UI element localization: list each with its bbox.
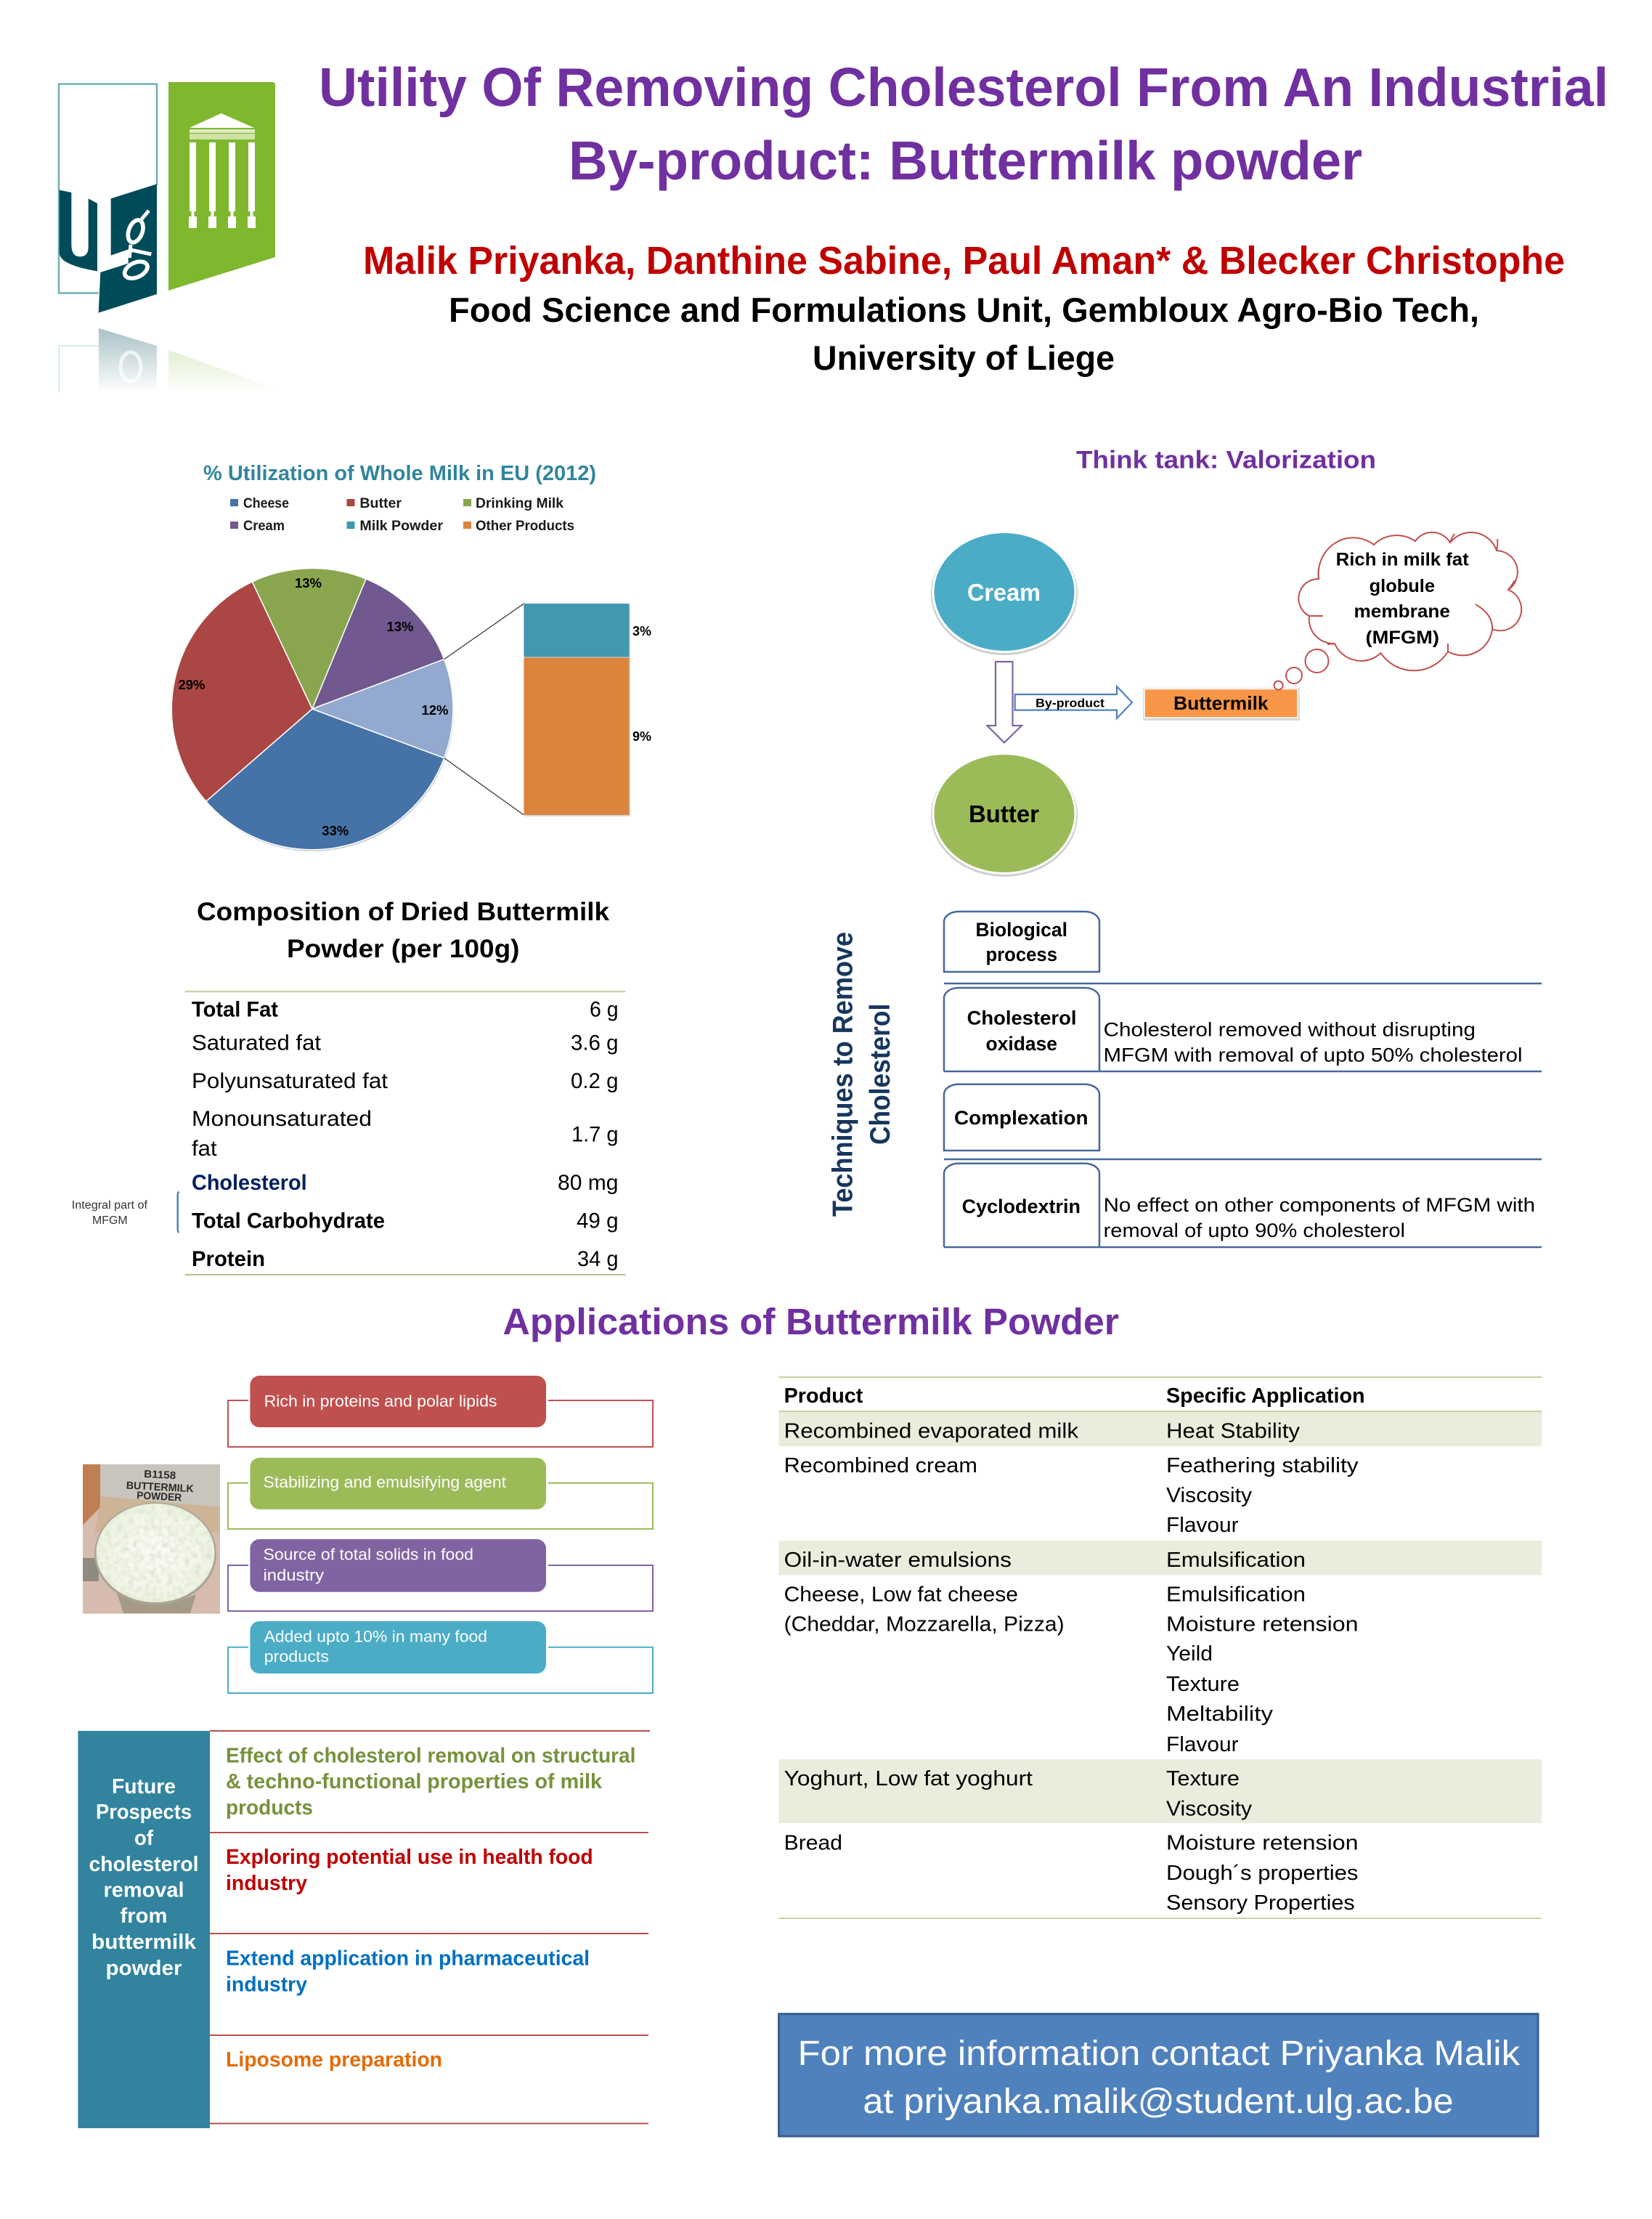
composition row labels: Saturated fat xyxy=(192,1031,321,1055)
composition row values: 3.6 g xyxy=(571,1031,619,1055)
prospect: health food: industry xyxy=(226,1872,307,1895)
prospect: pharmaceutical xyxy=(226,1947,590,1997)
MFGM bracket xyxy=(178,1192,179,1233)
butter circle xyxy=(931,753,1078,877)
specific application column: Moisture retension xyxy=(1166,1832,1358,1855)
item: proteins and polar lipids xyxy=(228,1376,653,1447)
composition row labels: Cholesterol xyxy=(192,1171,307,1195)
side panel text: removal xyxy=(103,1878,184,1902)
product column: Yoghurt, Low fat yoghurt xyxy=(784,1767,1033,1790)
side panel text: powder xyxy=(106,1957,182,1980)
technique names: Cholesterol xyxy=(967,1007,1076,1029)
authors: Malik Priyanka, Danthine Sabine, Paul Aman* & Blecker Christophe xyxy=(363,239,1565,283)
technique names: oxidase xyxy=(986,1033,1057,1055)
prospect: structural properties: Effect of cholesterol removal on structural xyxy=(226,1745,635,1768)
photo label text xyxy=(126,1469,195,1504)
MFGM note: Integral part of xyxy=(72,1199,148,1212)
prospect: health food xyxy=(226,1846,593,1895)
composition row values: 1.7 g xyxy=(571,1123,619,1146)
technique names: Cyclodextrin xyxy=(962,1196,1081,1217)
stacked bar of other products xyxy=(524,604,630,816)
affiliation xyxy=(449,291,1479,377)
buttermilk box: Buttermilk xyxy=(1173,692,1269,714)
chart legend: Cheese xyxy=(243,496,289,511)
MFGM note xyxy=(72,1199,148,1227)
cream circle xyxy=(931,532,1078,655)
photo label text: BUTTERMILK xyxy=(126,1480,195,1495)
specific application column: Viscosity xyxy=(1166,1797,1253,1820)
chart title: % Utilization of Whole Milk in EU (2012) xyxy=(203,462,596,485)
cloud text: Rich in milk fat xyxy=(1336,549,1469,569)
photo: buttermilk powder cup xyxy=(83,1464,220,1614)
logo green panel xyxy=(168,82,275,291)
composition row values: 6 g xyxy=(590,997,619,1021)
composition row labels xyxy=(192,997,388,1271)
specific application column: Flavour xyxy=(1166,1514,1239,1537)
specific application column: Dough´s properties xyxy=(1166,1862,1358,1885)
product column: Oil-in-water emulsions xyxy=(784,1549,1012,1572)
composition heading: Composition of Dried Buttermilk xyxy=(197,898,610,926)
composition heading xyxy=(197,898,610,963)
panel: applications table xyxy=(779,1377,1542,1918)
chart legend: Cream xyxy=(243,519,285,534)
rotated heading xyxy=(828,932,896,1217)
contact box: at priyanka.malik@student.ulg.ac.be xyxy=(863,2082,1454,2121)
specific application column: Meltability xyxy=(1166,1703,1274,1726)
logo: University of Liege xyxy=(59,82,275,392)
technique names xyxy=(954,919,1089,1217)
composition row values: 49 g xyxy=(577,1209,619,1233)
prospect: pharmaceutical: Extend application in pharmaceutical xyxy=(226,1947,590,1971)
product column xyxy=(784,1419,1079,1855)
down arrow xyxy=(987,662,1022,742)
side panel text: Prospects xyxy=(96,1801,192,1824)
affiliation: University of Liege xyxy=(813,338,1115,377)
composition row labels: fat xyxy=(192,1137,217,1161)
technique names: Complexation xyxy=(954,1107,1089,1129)
technique descriptions: MFGM with removal of upto 50% cholesterol xyxy=(1104,1044,1522,1066)
pie percentage labels: 13% xyxy=(386,620,414,634)
composition row labels: Total Fat xyxy=(192,997,278,1021)
specific application column: Flavour xyxy=(1166,1733,1239,1756)
specific application column: Sensory Properties xyxy=(1166,1891,1355,1915)
table header rule and bottom rule xyxy=(779,1411,1542,1918)
specific application column: Moisture retension xyxy=(1166,1613,1358,1636)
table rules xyxy=(779,1376,1542,1378)
title xyxy=(319,57,1608,191)
product column: Cheese, Low fat cheese xyxy=(784,1583,1018,1606)
specific application column: Yeild xyxy=(1166,1642,1213,1666)
composition row labels: Protein xyxy=(192,1247,265,1271)
butter circle: Butter xyxy=(969,801,1039,828)
photo label text: B1158 xyxy=(144,1469,176,1482)
table bottom rule xyxy=(185,1274,625,1275)
composition row labels: Monounsaturated xyxy=(192,1107,372,1131)
cloud text: membrane xyxy=(1354,601,1450,622)
logo reflection xyxy=(59,328,275,392)
specific application column xyxy=(1166,1419,1359,1915)
chart legend xyxy=(230,496,574,534)
technique descriptions: No effect on other components of MFGM with xyxy=(1104,1194,1535,1216)
technique descriptions: removal of upto 90% cholesterol xyxy=(1104,1220,1405,1241)
composition row values: 34 g xyxy=(577,1247,619,1271)
pie percentage labels: 13% xyxy=(295,576,322,591)
side panel text: cholesterol xyxy=(89,1853,199,1876)
affiliation: Food Science and Formulations Unit, Gembloux Agro-Bio Tech, xyxy=(449,291,1479,329)
technique names: Biological xyxy=(976,919,1067,941)
table header xyxy=(784,1384,1365,1408)
prospect: liposome: Liposome preparation xyxy=(226,2048,442,2072)
table bands xyxy=(779,1412,1542,1823)
rotated heading: Techniques to Remove xyxy=(828,932,859,1217)
specific application column: Texture xyxy=(1166,1673,1240,1696)
prospect: structural properties: & techno-functional properties of milk xyxy=(226,1770,603,1793)
table header: Product xyxy=(784,1384,863,1408)
contact box: For more information contact Priyanka Malik xyxy=(798,2035,1521,2073)
item: source of total solids xyxy=(228,1539,653,1611)
prospect: health food: Exploring potential use in health food xyxy=(226,1846,593,1869)
chart legend: Other Products xyxy=(476,519,574,534)
title: By-product: Buttermilk powder xyxy=(569,130,1362,191)
heading: Think tank: Valorization xyxy=(1076,446,1376,474)
item: source of total solids: Source of total solids in food xyxy=(263,1546,473,1564)
contact box xyxy=(779,2014,1538,2136)
item: added up to 10%: products xyxy=(264,1647,329,1666)
panel: techniques to remove cholesterol xyxy=(828,912,1542,1247)
product column: Recombined cream xyxy=(784,1454,977,1477)
item: added up to 10%: Added upto 10% in many food xyxy=(264,1628,487,1646)
composition row labels: Polyunsaturated fat xyxy=(192,1069,388,1093)
specific application column: Emulsification xyxy=(1166,1549,1306,1572)
technique descriptions xyxy=(1104,1019,1535,1241)
prospect: pharmaceutical: industry xyxy=(226,1973,307,1997)
technique boxes and rules xyxy=(944,912,1542,1247)
side panel text: of xyxy=(134,1827,153,1850)
side panel text: buttermilk xyxy=(91,1931,197,1954)
pie percentage labels: 33% xyxy=(322,824,349,838)
by-product arrow: By-product xyxy=(1035,696,1104,710)
chart legend: Butter xyxy=(359,496,402,511)
prospect: structural properties: products xyxy=(226,1796,313,1820)
item: proteins and polar lipids: Rich in proteins and polar lipids xyxy=(264,1392,497,1411)
side panel text: from xyxy=(121,1904,167,1928)
teal side panel xyxy=(78,1731,210,2128)
side panel text: Future xyxy=(112,1775,176,1798)
technique names: process xyxy=(986,944,1057,965)
panel: think tank valorization xyxy=(931,446,1521,877)
chart legend: Milk Powder xyxy=(359,519,444,534)
table rules xyxy=(185,991,625,992)
pie percentage labels: 3% xyxy=(632,624,651,638)
specific application column: Viscosity xyxy=(1166,1484,1253,1507)
pie chart xyxy=(171,568,454,851)
thought cloud xyxy=(1274,532,1521,690)
cloud text xyxy=(1336,549,1469,648)
panel: buttermilk powder properties list xyxy=(228,1376,653,1693)
pie percentage labels xyxy=(179,576,651,838)
item: stabilizing agent xyxy=(228,1458,653,1529)
specific application column: Texture xyxy=(1166,1767,1240,1790)
item: added up to 10% xyxy=(228,1621,653,1693)
cloud text: globule xyxy=(1370,576,1435,596)
item: source of total solids: industry xyxy=(263,1566,324,1584)
composition row values: 80 mg xyxy=(558,1171,619,1195)
rotated heading: Cholesterol xyxy=(865,1004,896,1145)
composition heading: Powder (per 100g) xyxy=(287,935,520,963)
panel: future prospects xyxy=(78,1731,650,2128)
side panel text xyxy=(89,1775,199,1980)
specific application column: Heat Stability xyxy=(1166,1419,1301,1443)
photo label text: POWDER xyxy=(137,1490,182,1504)
pie percentage labels: 12% xyxy=(421,703,449,718)
MFGM note: MFGM xyxy=(92,1214,128,1227)
panel: milk utilization chart xyxy=(171,462,651,851)
product column: (Cheddar, Mozzarella, Pizza) xyxy=(784,1613,1065,1636)
technique descriptions: Cholesterol removed without disrupting xyxy=(1104,1019,1476,1041)
specific application column: Feathering stability xyxy=(1166,1454,1359,1477)
specific application column: Emulsification xyxy=(1166,1583,1306,1606)
logo building pediment and columns xyxy=(189,113,256,228)
product column: Recombined evaporated milk xyxy=(784,1419,1079,1443)
composition row values: 0.2 g xyxy=(571,1069,619,1093)
cream circle: Cream xyxy=(967,580,1041,607)
separators xyxy=(210,1731,650,2124)
prospect: structural properties xyxy=(226,1745,635,1820)
by-product arrow xyxy=(1015,686,1132,718)
composition row labels: Total Carbohydrate xyxy=(192,1209,385,1233)
panel: composition table xyxy=(72,898,625,1275)
applications heading: Applications of Buttermilk Powder xyxy=(502,1301,1119,1342)
pie percentage labels: 9% xyxy=(632,729,651,744)
title: Utility Of Removing Cholesterol From An Industrial xyxy=(319,57,1608,118)
chart legend: Drinking Milk xyxy=(476,496,563,511)
cloud text: (MFGM) xyxy=(1365,628,1439,648)
logo dark letter blocks xyxy=(60,184,157,313)
buttermilk box xyxy=(1143,688,1300,721)
composition row values xyxy=(558,997,619,1271)
table header: Specific Application xyxy=(1166,1384,1365,1408)
connector lines xyxy=(444,604,524,815)
product column: Bread xyxy=(784,1832,842,1855)
item: stabilizing agent: Stabilizing and emulsifying agent xyxy=(263,1473,506,1491)
pie percentage labels: 29% xyxy=(179,678,205,692)
logo outline xyxy=(59,84,157,293)
